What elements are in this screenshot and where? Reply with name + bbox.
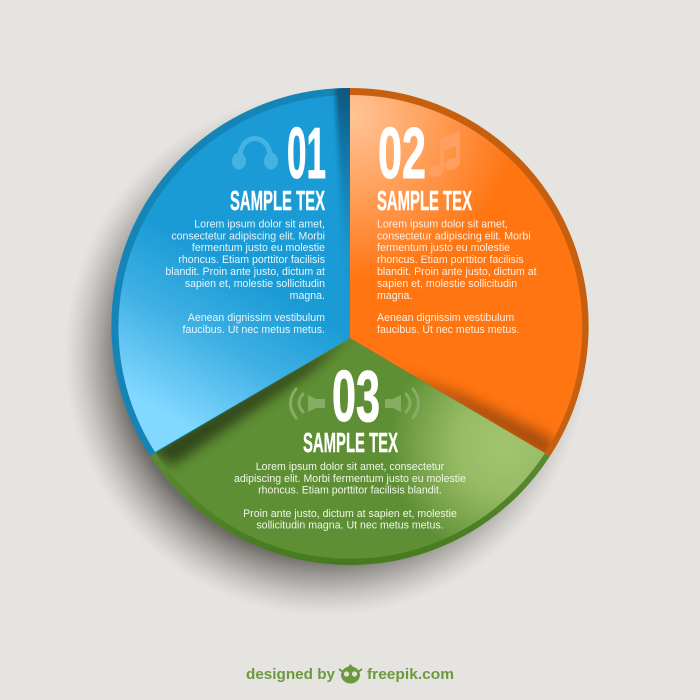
text block: green body: adipiscing elit. Morbi fermentum justo eu molestie bbox=[234, 473, 466, 485]
text block: green body: Lorem ipsum dolor sit amet, consectetur bbox=[256, 461, 445, 473]
panel: 01 blue slice bbox=[111, 84, 356, 456]
panel: 02 orange slice bbox=[350, 88, 589, 462]
text block: orange body: fermentum justo eu molestie bbox=[377, 242, 510, 254]
text block: orange body bbox=[377, 218, 537, 336]
heading: sample tex 01: SAMPLE TEX bbox=[230, 185, 325, 216]
blue slice rim bbox=[111, 88, 350, 456]
text block: blue body: rhoncus. Etiam porttitor facilisis bbox=[178, 254, 325, 266]
icon: music note bbox=[427, 131, 461, 179]
text block: blue body: Lorem ipsum dolor sit amet, bbox=[194, 218, 325, 230]
number 03: 03 bbox=[332, 357, 380, 437]
text block: orange body: consectetur adipiscing elit. Morbi bbox=[377, 230, 531, 242]
text block: green body: Proin ante justo, dictum at sapien et, molestie bbox=[243, 508, 457, 520]
heading: sample tex 03: SAMPLE TEX bbox=[303, 427, 398, 458]
text block: green body: rhoncus. Etiam porttitor facilisis blandit. bbox=[258, 484, 442, 496]
icon: left speaker bbox=[290, 389, 325, 418]
text block: orange body: sapien et, molestie sollicitudin bbox=[377, 278, 517, 290]
text block: orange body: blandit. Proin ante justo, dictum at bbox=[377, 266, 537, 278]
text block: orange body: faucibus. Ut nec metus metus. bbox=[377, 324, 520, 336]
text block: orange body: Aenean dignissim vestibulum bbox=[377, 312, 514, 324]
text block: orange body: Lorem ipsum dolor sit amet, bbox=[377, 218, 508, 230]
shadow cast by blue slice on green bbox=[150, 335, 350, 466]
text block: blue body bbox=[165, 218, 325, 336]
blue slice dark edge band bbox=[333, 88, 350, 245]
number 02: 02 bbox=[378, 114, 426, 194]
orange slice rim bbox=[350, 88, 589, 456]
panel: 01 blue slice: 01 bbox=[287, 114, 326, 194]
credit text left: designed by bbox=[246, 667, 335, 683]
panel: 03 green slice bbox=[150, 335, 550, 565]
icon: headphones bbox=[232, 138, 278, 170]
icon: right speaker bbox=[385, 389, 418, 418]
text block: blue body: Aenean dignissim vestibulum bbox=[188, 312, 325, 324]
text block: blue body: blandit. Proin ante justo, dictum at bbox=[165, 266, 325, 278]
heading: sample tex 02: SAMPLE TEX bbox=[377, 185, 472, 216]
text block: blue body: fermentum justo eu molestie bbox=[192, 242, 325, 254]
text block: green body: sollicitudin magna. Ut nec metus metus. bbox=[256, 520, 444, 532]
green slice face bbox=[155, 339, 545, 559]
orange slice face bbox=[350, 95, 582, 453]
footer credit bbox=[246, 664, 454, 684]
text block: orange body: magna. bbox=[377, 290, 412, 302]
credit text right: freepik.com bbox=[367, 667, 454, 683]
text block: blue body: sapien et, molestie sollicitudin bbox=[185, 278, 325, 290]
text block: orange body: rhoncus. Etiam porttitor facilisis bbox=[377, 254, 524, 266]
icon: freepik mascot bbox=[339, 664, 362, 684]
green slice rim bbox=[150, 338, 550, 565]
green slice highlight bbox=[155, 339, 545, 559]
text block: green body bbox=[234, 461, 466, 532]
blue slice face bbox=[118, 95, 350, 452]
orange slice lower edge shade bbox=[410, 372, 556, 453]
text block: blue body: consectetur adipiscing elit. Morbi bbox=[171, 230, 325, 242]
long drop shadow of the pie bbox=[64, 92, 588, 616]
text block: blue body: magna. bbox=[290, 290, 325, 302]
text block: blue body: faucibus. Ut nec metus metus. bbox=[182, 324, 325, 336]
